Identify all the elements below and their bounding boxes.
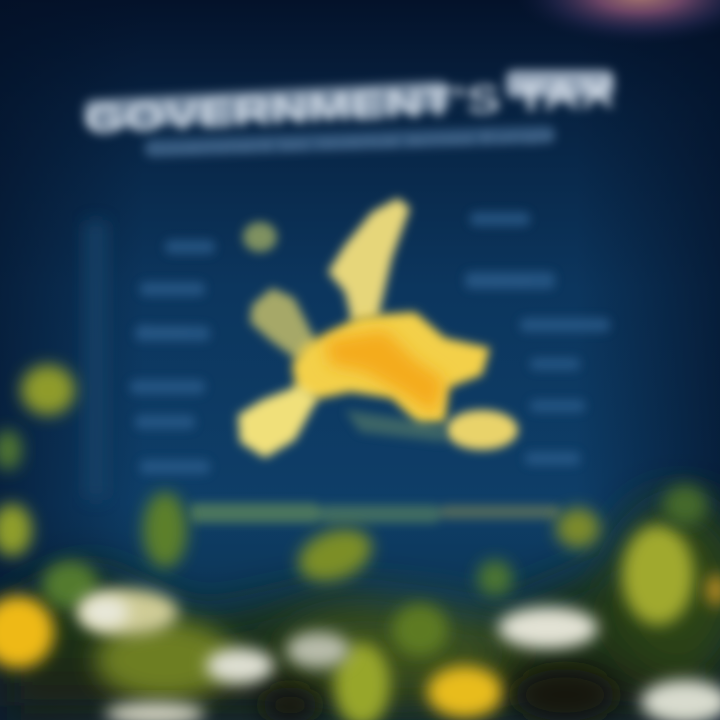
map: connecting strip [345,410,445,442]
subtitle: Government tax revenue across Europe [145,128,555,159]
map: Iceland [243,222,277,252]
leaf: lower left wash [95,620,235,700]
leaf: centre [291,519,379,591]
subtitle [145,125,555,159]
flower: white centre left [206,648,274,684]
dark seed heads [262,669,615,720]
leaf: left edge [0,504,32,556]
left labels [130,240,215,474]
flower: orange right edge [706,574,720,606]
flowers [0,574,720,720]
flower: yellow left [0,596,54,668]
left axis column [84,220,108,500]
leaf: right small [556,508,600,548]
map: British Isles [250,288,318,362]
leaves [0,365,707,720]
leaf: upper left [21,365,75,415]
leaf: bottom centre [334,643,390,720]
map: mainland [292,312,490,424]
leaf: lower centre [392,604,448,656]
foliage dark base [0,500,720,720]
flower: white left core [81,596,129,628]
map: Iberia [238,385,318,458]
leaf: left small [0,430,22,470]
leaf: right big [622,525,694,625]
leaf: lower left [42,561,98,609]
flower: white bottom right [641,680,720,720]
flower: yellow centre [427,666,503,718]
title: GOVERNMENT'S TAX [84,71,616,143]
leaf: centre right [477,560,513,596]
legend bar [190,503,560,523]
map: Scandinavia [328,198,410,322]
flower: white left [78,589,178,635]
left labels: Revenue [140,322,188,336]
title [83,70,616,143]
flower: white bottom left [105,702,205,720]
map of Europe [238,198,518,458]
right labels: Income tax [470,274,529,288]
map: mainland highlight [325,330,445,415]
right labels [465,212,610,465]
flower: white centre [286,632,350,668]
leaf: left centre [143,492,187,568]
map: southeast [446,410,518,450]
flower: white right [498,607,598,649]
leaf: right top [663,485,707,525]
